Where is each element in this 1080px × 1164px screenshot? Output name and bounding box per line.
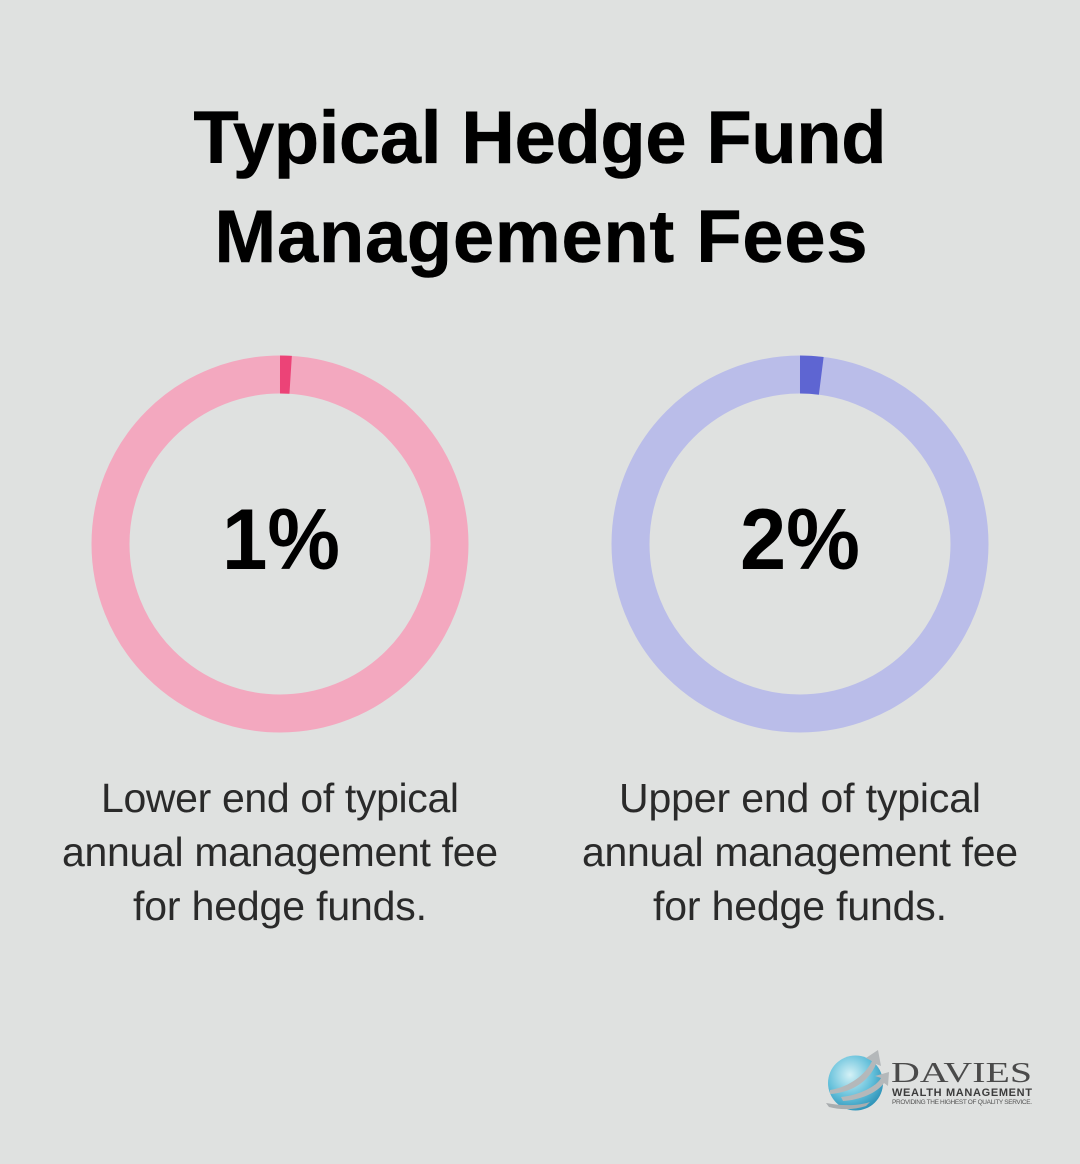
description: lower end: for hedge funds. [133, 883, 427, 929]
panel: 2% upper end [582, 374, 1018, 929]
icon: globe with arrows [826, 1050, 889, 1110]
description: lower end [62, 775, 498, 929]
wordmark: wealth management: WEALTH MANAGEMENT [892, 1087, 1032, 1099]
description: upper end: Upper end of typical [619, 775, 981, 821]
logo: Davies Wealth Management [826, 1050, 1032, 1110]
description: lower end: annual management fee [62, 829, 498, 875]
tagline: PROVIDING THE HIGHEST OF QUALITY SERVICE. [892, 1099, 1032, 1106]
description: upper end [582, 775, 1018, 929]
description: lower end: Lower end of typical [101, 775, 459, 821]
description: upper end: for hedge funds. [653, 883, 947, 929]
title [194, 96, 886, 278]
panel: 1% lower end [62, 374, 498, 929]
value: 2%: 2% [740, 492, 860, 588]
value: 1%: 1% [222, 492, 340, 588]
title: Typical Hedge Fund [194, 96, 886, 179]
wordmark: DAVIES [891, 1057, 1032, 1089]
description: upper end: annual management fee [582, 829, 1018, 875]
title: Management Fees [214, 195, 868, 278]
donut chart: 2% [630, 374, 970, 714]
donut chart: 1% [110, 374, 450, 714]
